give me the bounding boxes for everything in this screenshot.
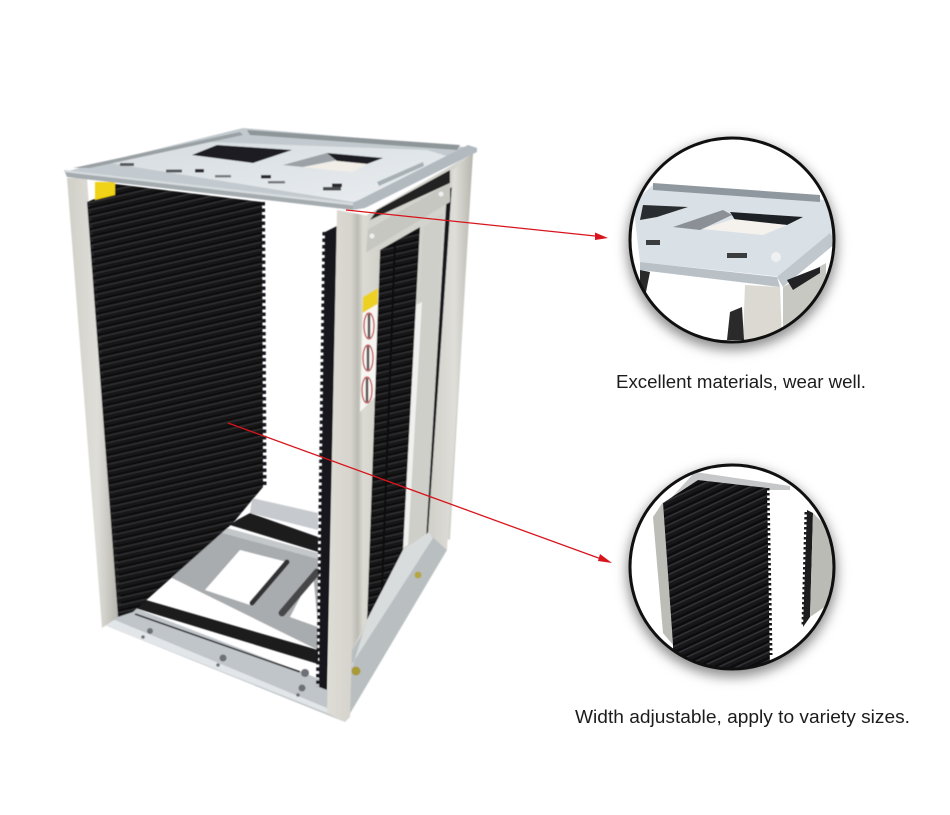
arrow: panel detail: [228, 423, 612, 563]
window two: [283, 153, 383, 172]
base plate: [102, 600, 345, 722]
magnified top frame: [634, 183, 832, 340]
left ribbed panel: [87, 184, 264, 617]
crossbar: [365, 183, 450, 253]
caption: top frame: Excellent materials, wear well.: [616, 372, 866, 392]
flange bolts: [352, 572, 422, 676]
right post: [428, 153, 473, 550]
left post: [67, 178, 118, 628]
right base flange: [345, 532, 447, 722]
window one: [192, 145, 292, 163]
arrow: top detail: [346, 210, 608, 240]
rack back floor and rail: [230, 498, 318, 552]
top frame: [64, 128, 477, 210]
toothed narrow strip: [318, 226, 337, 690]
warning sticker: [360, 288, 378, 412]
front left rim: [64, 170, 353, 210]
yellow bracket: [95, 182, 115, 200]
caption: ribbed panel: Width adjustable, apply to variety sizes.: [575, 707, 910, 727]
product illustration: rack: [64, 128, 477, 722]
inner floor plate: [170, 527, 318, 650]
magnified ribbed panel: [653, 472, 832, 668]
front post: [327, 210, 380, 722]
detail circle: top frame: [625, 130, 840, 350]
ribbed black strip: [367, 227, 420, 620]
detail circle: ribbed panel: [625, 460, 840, 677]
right side assembly: [352, 153, 473, 676]
front right rim: [353, 145, 477, 210]
